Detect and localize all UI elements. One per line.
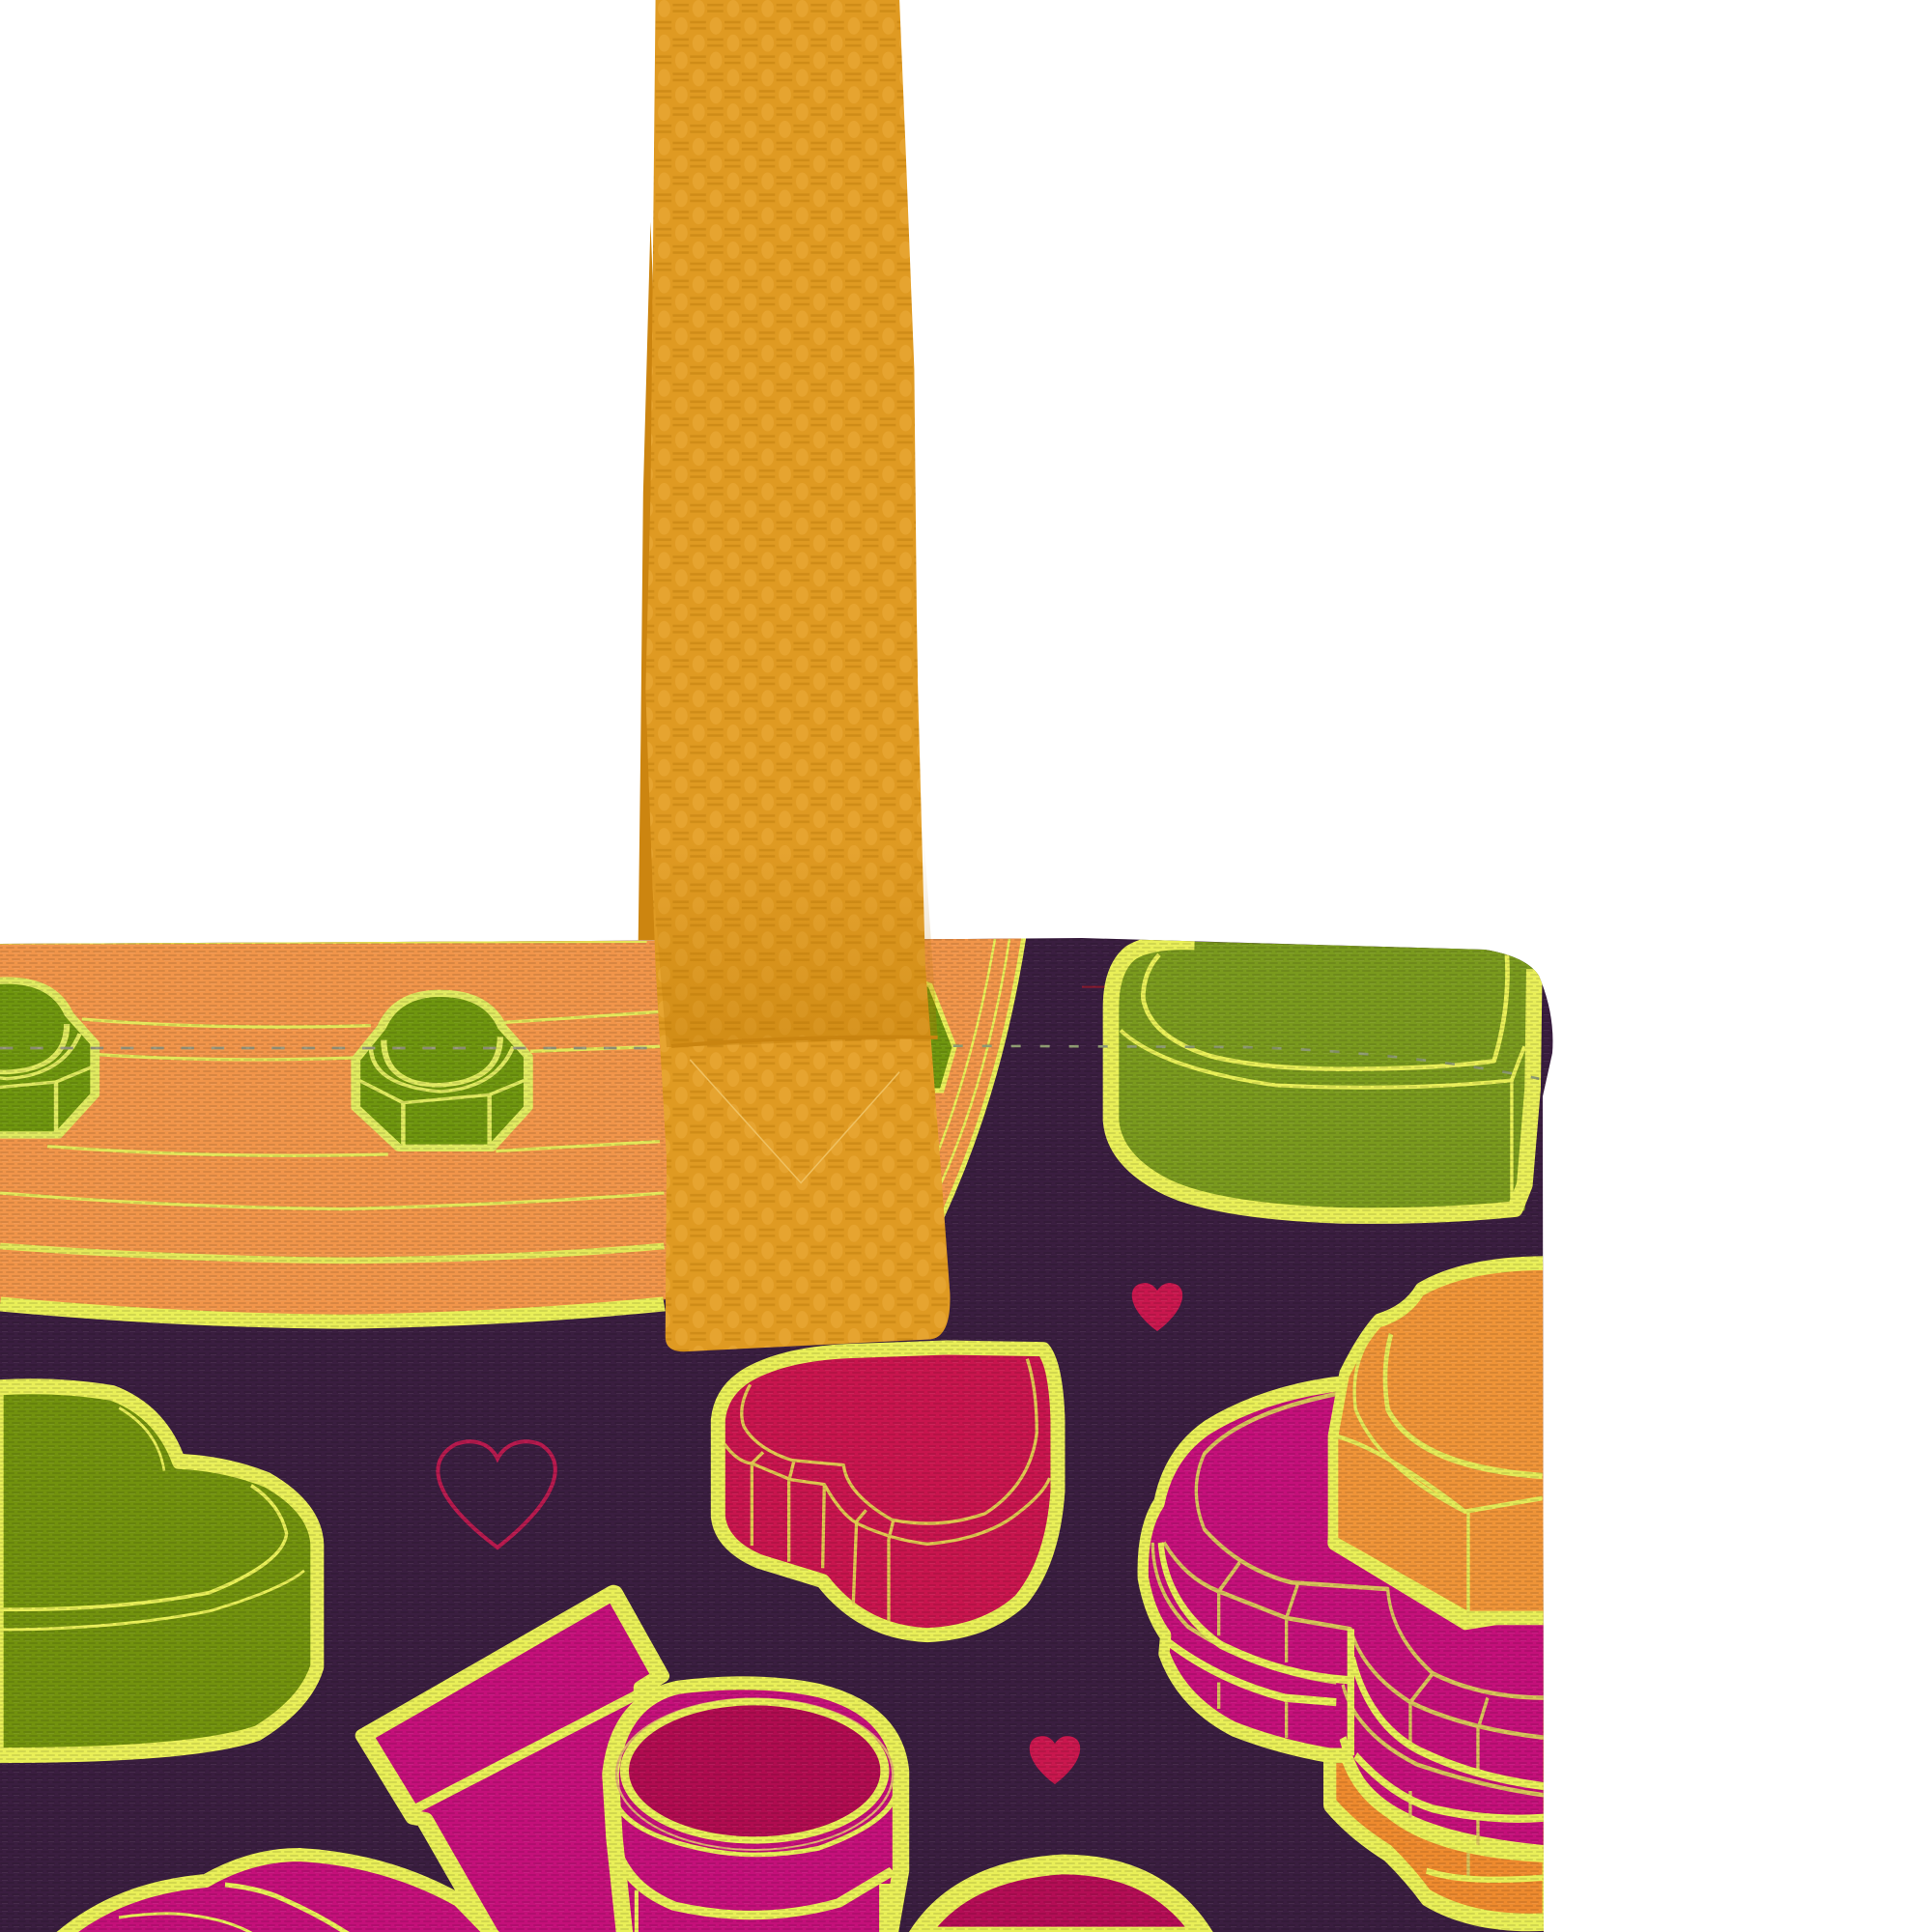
orange cylinder contour lines and hex nuts bbox=[0, 942, 664, 1321]
strap diagonal stitches bbox=[690, 1060, 899, 1182]
large orange cylinder fill bbox=[0, 936, 1026, 1324]
icon: hex nut centre bbox=[355, 993, 528, 1148]
red heart box bbox=[718, 1348, 1058, 1635]
green heart box top right bbox=[953, 940, 1539, 1216]
magenta and orange stacked discs with orange nut bbox=[1143, 1264, 1548, 1922]
strap back fold bbox=[639, 222, 661, 940]
magenta cup bottom centre bbox=[918, 1864, 1205, 1932]
magenta flower-pot block bbox=[364, 1592, 901, 1932]
icon: hex nut left bbox=[0, 980, 95, 1135]
green heart box left bbox=[0, 1386, 317, 1755]
outlined heart bbox=[438, 1441, 555, 1548]
bag body bbox=[0, 927, 1565, 1932]
magenta disc bottom left bbox=[58, 1855, 497, 1932]
stitching line left bbox=[0, 1047, 647, 1049]
strap seam fold bbox=[671, 1037, 938, 1046]
fabric texture bbox=[0, 927, 1565, 1932]
small heart upper bbox=[1132, 1283, 1182, 1331]
icon: hex nut behind strap bbox=[926, 981, 956, 1094]
small heart lower bbox=[1030, 1736, 1080, 1784]
orange cylinder right edge lines bbox=[935, 936, 1024, 1217]
strap front bbox=[645, 0, 950, 1351]
orange nut bbox=[1333, 1264, 1548, 1618]
lower orange disc bbox=[1330, 1724, 1548, 1922]
strap bbox=[639, 0, 950, 1351]
magenta discs bbox=[1143, 1383, 1548, 1853]
magenta cup bbox=[611, 1683, 901, 1932]
stitching line right bbox=[953, 1046, 1539, 1079]
strap shading above seam bbox=[649, 838, 938, 1047]
